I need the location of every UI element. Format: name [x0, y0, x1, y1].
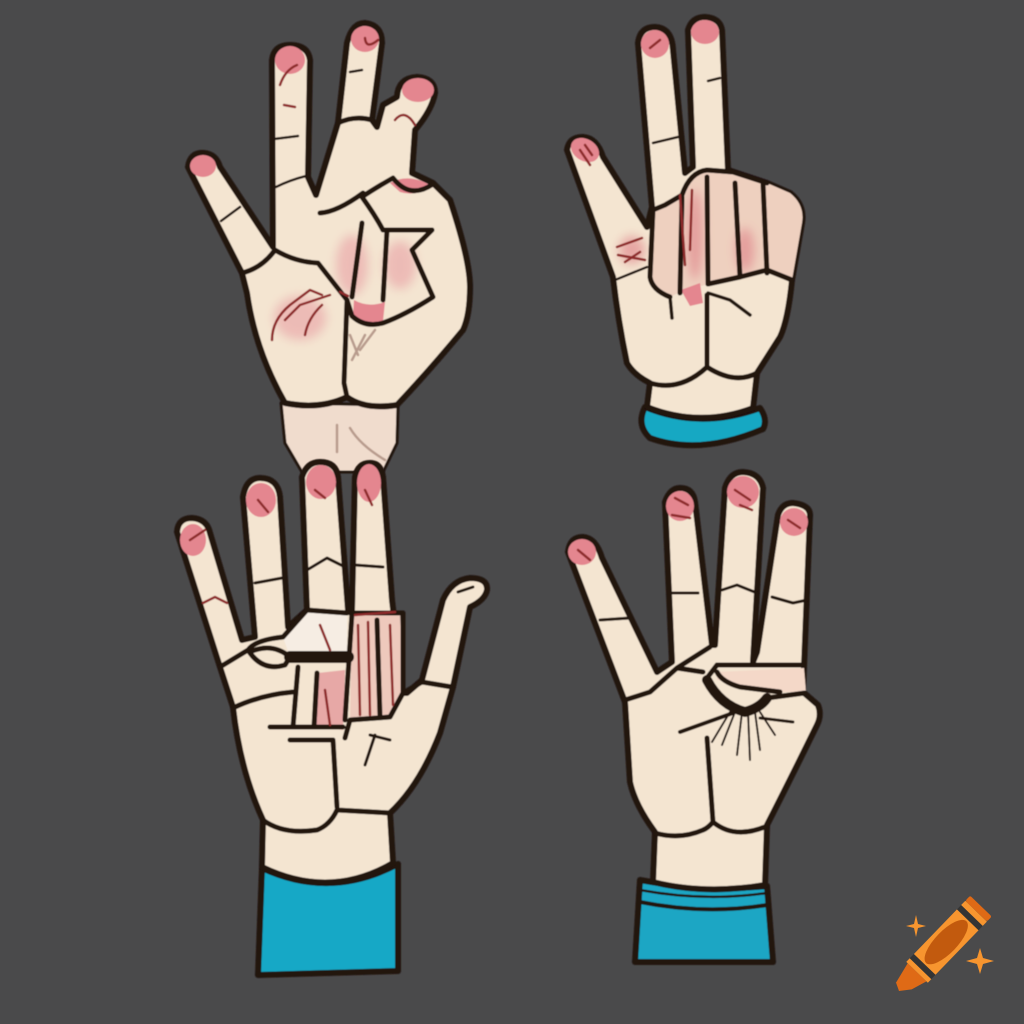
sleeve: bottom left	[258, 864, 398, 975]
sparkle large	[966, 948, 994, 974]
logo: crayon with sparkles	[888, 896, 994, 1001]
cuff: bottom right	[635, 880, 773, 962]
hand: top left	[188, 23, 470, 472]
sparkle small	[906, 915, 926, 937]
hand: bottom right	[568, 472, 820, 962]
hand: bottom left	[177, 462, 487, 975]
cuff: top right	[641, 407, 765, 445]
hand: top right	[567, 17, 802, 445]
crayon	[888, 896, 992, 1001]
